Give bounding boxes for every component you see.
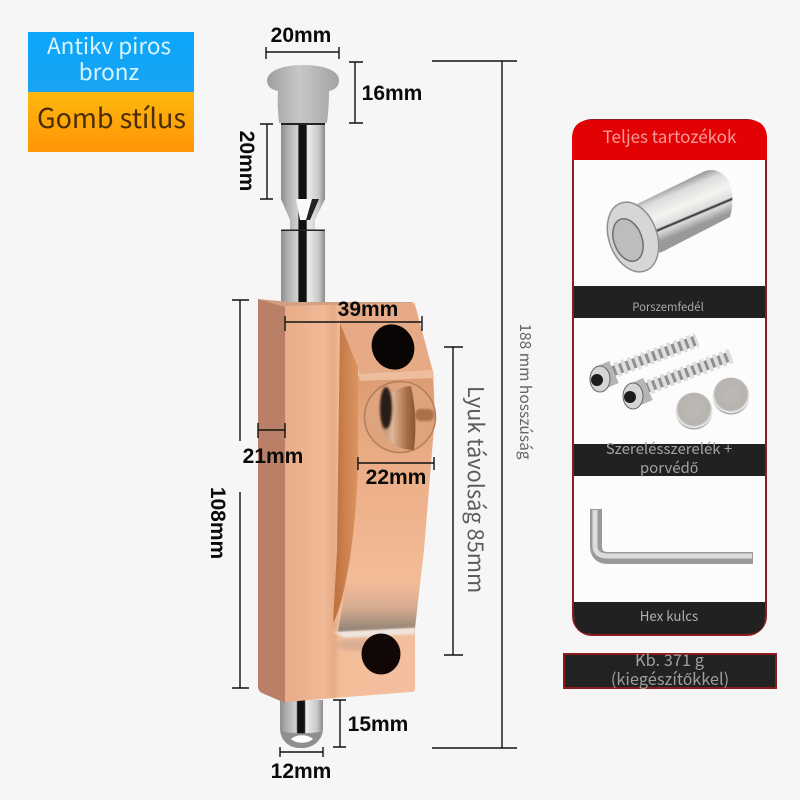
dimension: total length 188 mm: 188 mm hosszúság <box>515 323 537 460</box>
dimension: hole distance 85mm: Lyuk távolság 85mm <box>461 386 492 593</box>
dimension: pin width 12mm: 12mm <box>271 760 331 783</box>
caption bar: Hex kulcs <box>574 602 765 634</box>
icon: bottom screw hole <box>362 634 400 674</box>
icon: dust caps <box>676 378 750 430</box>
dimension: thumb turn 22mm: 22mm <box>366 466 426 489</box>
caption bar: Hex kulcs: Hex kulcs <box>640 606 698 625</box>
caption bar: Szerelésszerelék + porvédő <box>574 438 765 478</box>
style label: Gomb stílus <box>28 92 194 152</box>
dimension: hole distance 85mm <box>444 347 492 655</box>
dimension: knob width 20mm: 20mm <box>271 24 331 47</box>
panel header: Teljes tartozékok <box>603 123 737 148</box>
dimension: side 21mm: 21mm <box>243 445 303 468</box>
dimension: knob height 16mm: 16mm <box>362 82 422 105</box>
dimension: thumb turn 22mm <box>358 457 434 489</box>
colour label: Antikv piros bronz: Antikv piros <box>47 29 171 61</box>
dimension: body width 39mm <box>285 298 422 331</box>
icon: lower pin <box>280 700 323 748</box>
dimension: pin width 12mm <box>271 747 331 783</box>
icon: mounting screws <box>590 340 731 409</box>
caption bar: Szerelésszerelék + porvédő: Szerelésszerelék + <box>606 438 732 459</box>
panel: accessories <box>572 120 767 635</box>
icon: thumb turn <box>364 382 436 452</box>
caption bar: Porszemfedél: Porszemfedél <box>632 299 704 315</box>
dimension: shaft 20mm <box>235 124 273 199</box>
caption bar: Szerelésszerelék + porvédő: porvédő <box>640 457 698 478</box>
dimension: body height 108mm <box>206 300 249 688</box>
colour label: Antikv piros bronz: bronz <box>79 55 140 87</box>
dimension: body width 39mm: 39mm <box>338 298 398 321</box>
dimension: pin length 15mm <box>333 700 408 747</box>
icon: hex key <box>595 509 753 558</box>
colour label: Antikv piros bronz <box>28 29 194 92</box>
dimension: shaft 20mm: 20mm <box>235 131 258 191</box>
panel background <box>573 120 766 635</box>
weight label: Kb. 371 g <box>635 647 704 671</box>
dimension: knob width 20mm <box>266 24 339 59</box>
product: bolt lock <box>258 65 436 748</box>
bronze body <box>258 299 435 703</box>
badge: colour and style <box>28 29 194 152</box>
icon: round knob <box>267 65 339 123</box>
icon: top screw hole <box>364 317 422 377</box>
weight label: (kiegészítőkkel) <box>611 666 729 690</box>
dimension: side 21mm <box>243 423 303 468</box>
dimension: total length 188 mm <box>432 61 537 748</box>
style label: Gomb stílus: Gomb stílus <box>37 97 186 136</box>
dimension: knob height 16mm <box>349 62 422 123</box>
weight label <box>564 647 776 690</box>
icon: dust cover <box>598 170 732 279</box>
caption bar: Porszemfedél <box>574 286 765 318</box>
dimension: body height 108mm: 108mm <box>206 487 229 559</box>
panel header <box>572 120 767 160</box>
dimension: pin length 15mm: 15mm <box>348 713 408 736</box>
icon: upper shaft <box>281 123 325 302</box>
